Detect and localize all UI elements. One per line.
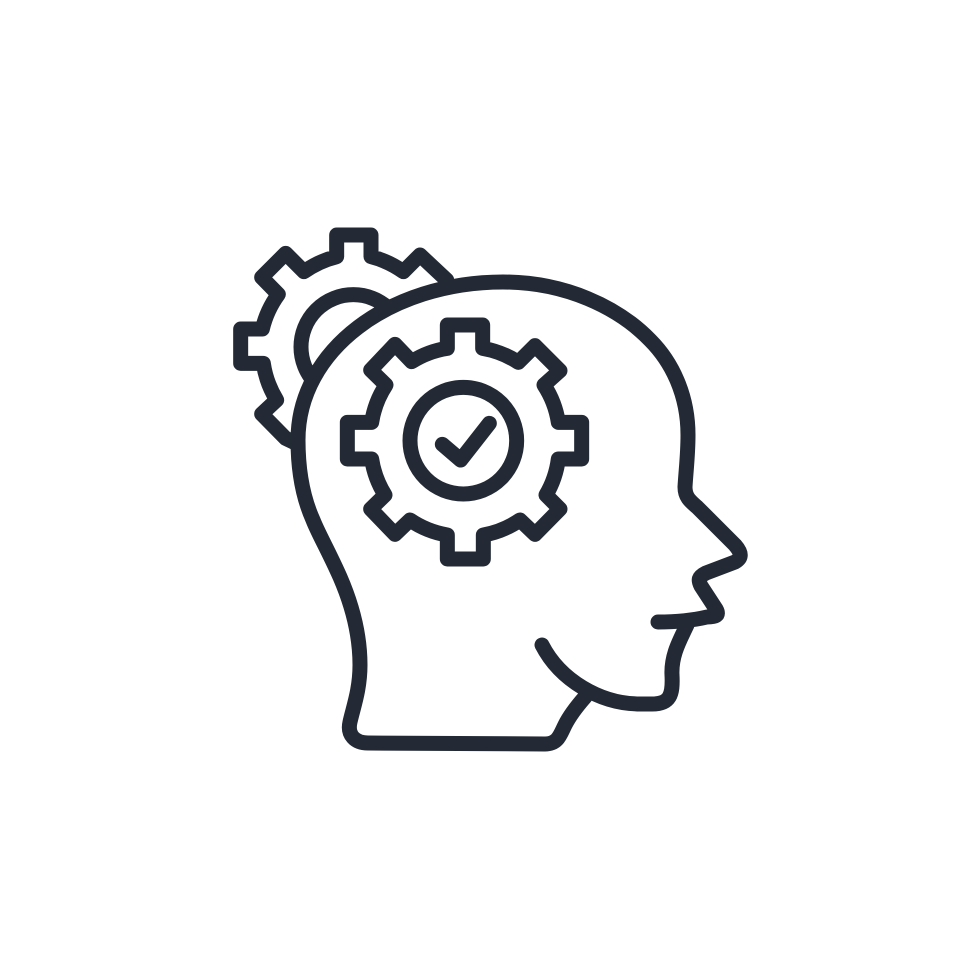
icon: jaw line <box>542 625 687 704</box>
icon: back gear <box>241 235 447 448</box>
icon: check mark <box>442 423 489 460</box>
icon: inner ring <box>410 387 517 494</box>
icon: head outline <box>298 282 740 744</box>
icon: front gear teeth <box>347 325 582 559</box>
icon: front gear with check mark <box>347 325 582 559</box>
